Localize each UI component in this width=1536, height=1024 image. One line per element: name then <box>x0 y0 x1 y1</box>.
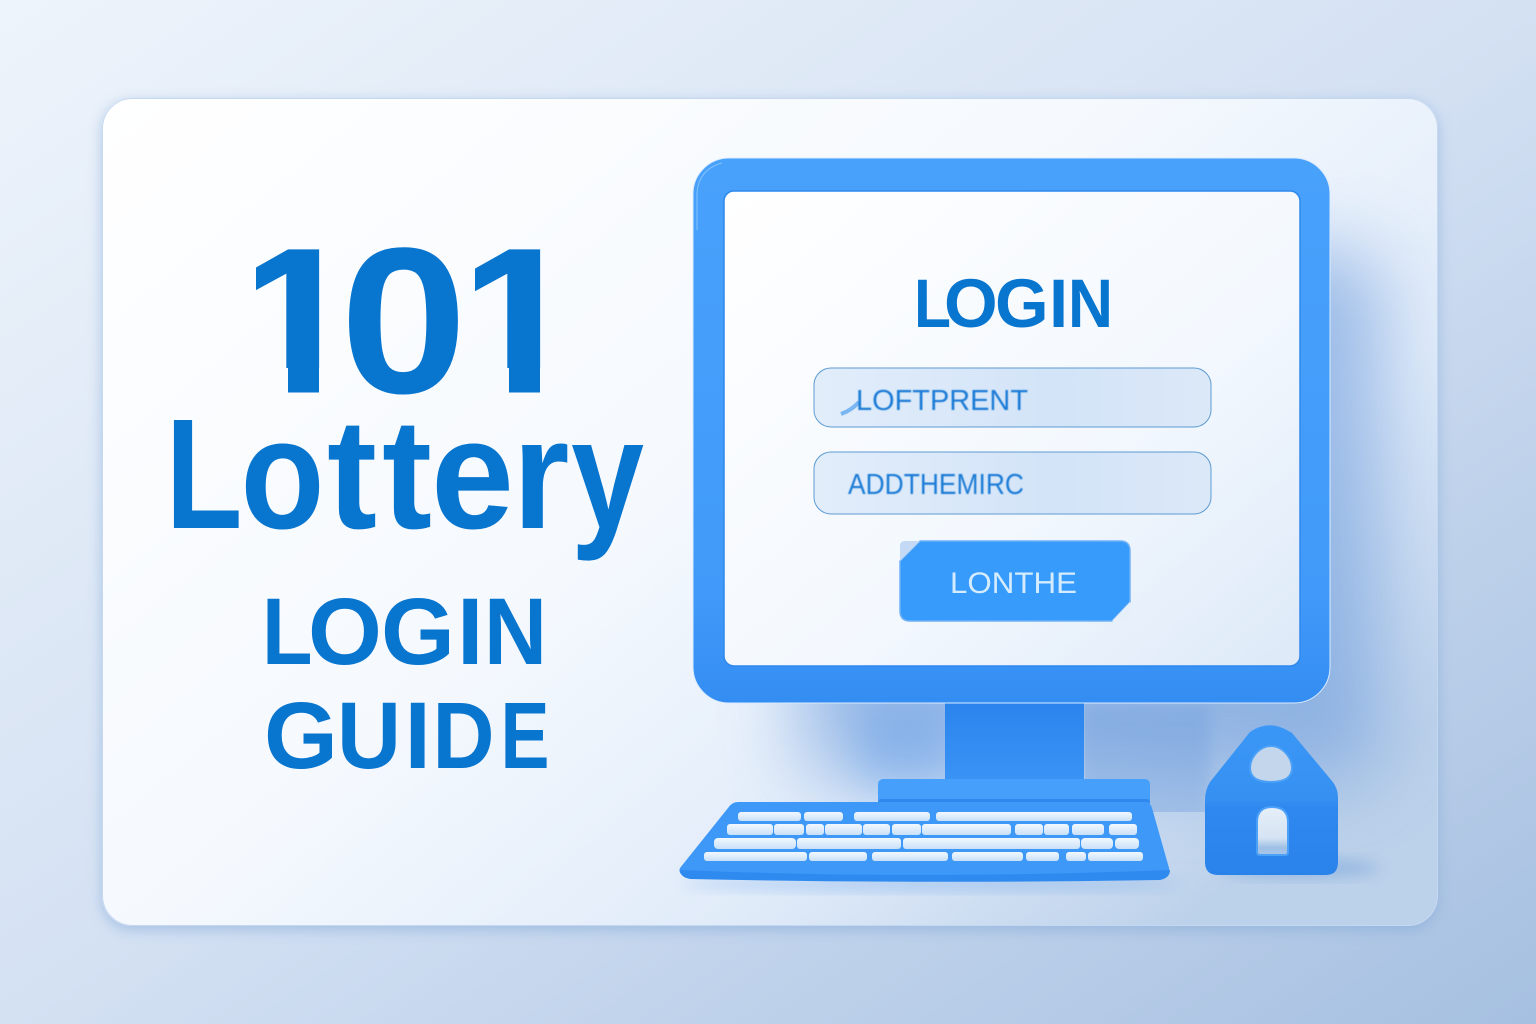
subtitle: LOGIN: L <box>262 579 312 685</box>
panel: main card <box>102 98 1438 930</box>
lock keyhole <box>1257 807 1288 855</box>
username field <box>814 368 1211 427</box>
monitor screen <box>724 191 1300 666</box>
title: 101: 1 <box>230 206 364 438</box>
title: Lottery: e <box>431 387 514 562</box>
lock shackle hole <box>1250 746 1292 782</box>
title: 101: 1 <box>452 206 584 438</box>
title: Lottery: t <box>382 387 432 562</box>
password field: ADDTHEMIRC <box>848 469 1024 501</box>
subtitle: LOGIN: O <box>308 579 382 685</box>
title: Lottery: y <box>571 387 644 562</box>
title: Lottery: o <box>240 387 324 562</box>
screen heading: LOGIN: N <box>1068 265 1113 342</box>
subtitle: LOGIN: I <box>457 579 483 685</box>
screen heading: LOGIN: L <box>914 265 951 342</box>
icon: padlock <box>1205 725 1338 875</box>
subtitle: LOGIN: N <box>484 579 547 685</box>
login button <box>900 541 1130 621</box>
login button: LONTHE <box>950 567 1077 600</box>
username field: LOFTPRENT <box>856 385 1028 417</box>
keyboard <box>679 802 1170 882</box>
title: Lottery: t <box>327 387 377 562</box>
screen heading: LOGIN: O <box>944 265 998 342</box>
keys <box>704 812 1143 861</box>
monitor frame <box>693 158 1330 703</box>
screen heading: LOGIN: G <box>995 265 1049 342</box>
screen heading: LOGIN: I <box>1049 265 1068 342</box>
subtitle: GUIDE: U <box>337 683 401 789</box>
title: 101: 0 <box>340 206 467 438</box>
title: Lottery: L <box>166 387 242 562</box>
subtitle: LOGIN: G <box>381 579 455 685</box>
subtitle: GUIDE: D <box>432 683 494 789</box>
subtitle: GUIDE: I <box>404 683 431 789</box>
subtitle: GUIDE: G <box>264 683 338 789</box>
monitor <box>693 158 1330 703</box>
subtitle: GUIDE: E <box>500 683 550 789</box>
password field <box>814 452 1211 514</box>
title: Lottery: r <box>512 387 570 562</box>
title: 101 <box>256 247 540 394</box>
monitor stand <box>878 698 1150 805</box>
